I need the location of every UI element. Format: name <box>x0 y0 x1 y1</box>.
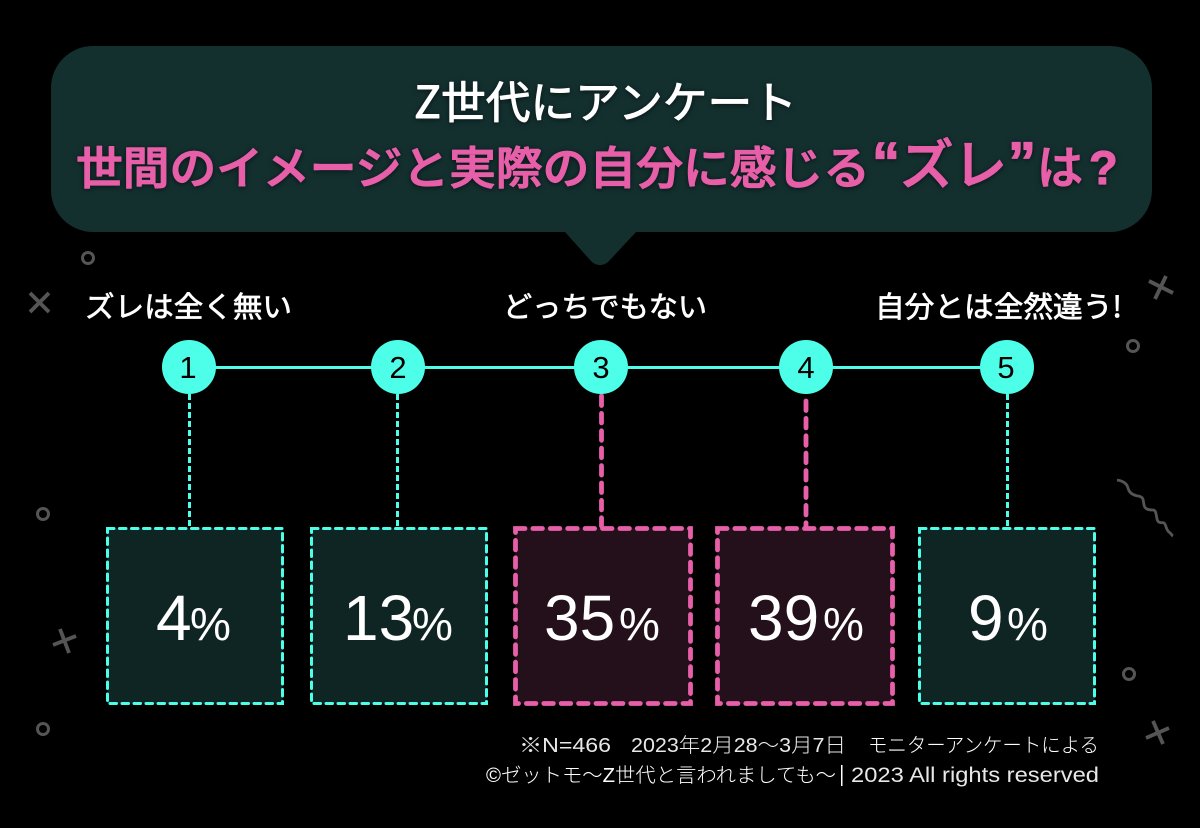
result box 4: 39%: 39 <box>748 582 819 654</box>
scale point 2: 2 <box>389 350 407 385</box>
scale line <box>189 366 1007 369</box>
result box 3: 35% <box>516 528 690 704</box>
result box 4: 39% <box>718 528 892 704</box>
scale label: totally different: 自分とは全然違う! <box>875 284 1122 326</box>
survey note: ※N=466 <box>519 735 611 757</box>
result box 5: 9% <box>920 528 1094 704</box>
scale label: no gap: ズレは全く無い <box>85 284 292 326</box>
title line 2 <box>76 121 1118 200</box>
result box 2: 13%: % <box>412 598 453 650</box>
title line 2: ズレ <box>900 121 1007 200</box>
result box 1: 4% <box>108 528 282 704</box>
scale point 1: 1 <box>179 350 197 385</box>
copyright: 2023 All rights reserved <box>851 763 1099 787</box>
copyright <box>486 763 1099 787</box>
scale point 4: 4 <box>797 350 815 385</box>
scale point 3 <box>574 340 628 394</box>
title line 2: “ <box>872 130 900 193</box>
title line 2: 世間のイメージと実際の自分に感じる <box>76 132 870 197</box>
title line 2: ” <box>1008 130 1036 193</box>
result box 5: 9%: % <box>1007 598 1048 650</box>
title line 2: は <box>1037 132 1083 198</box>
scale label: neutral: どっちでもない <box>503 284 707 326</box>
result box 3: 35%: 35 <box>544 582 615 654</box>
background decorations <box>30 252 1173 744</box>
scale point 3: 3 <box>592 350 610 385</box>
survey note: モニターアンケートによる <box>868 729 1099 758</box>
scale point 5 <box>980 340 1034 394</box>
result box 2: 13% <box>312 528 486 704</box>
result box 1: 4%: % <box>190 598 231 650</box>
result box 5: 9%: 9 <box>968 582 1004 654</box>
title line 1: Z世代にアンケート <box>414 67 797 131</box>
title line 2: ? <box>1089 141 1118 194</box>
result box 2: 13%: 13 <box>343 582 414 654</box>
survey note <box>519 729 1099 758</box>
scale point 2 <box>371 340 425 394</box>
dashed connectors <box>190 394 1008 528</box>
result box 1: 4%: 4 <box>156 582 192 654</box>
scale point 5: 5 <box>997 350 1015 385</box>
copyright: ©ゼットモ〜Z世代と言われましても〜 <box>486 764 836 787</box>
scale point 4 <box>779 340 833 394</box>
survey note: 2023年2月28〜3月7日 <box>631 734 846 757</box>
result box 4: 39%: % <box>823 598 864 650</box>
scale point 1 <box>162 340 216 394</box>
speech bubble header <box>51 46 1152 265</box>
result box 3: 35%: % <box>619 598 660 650</box>
